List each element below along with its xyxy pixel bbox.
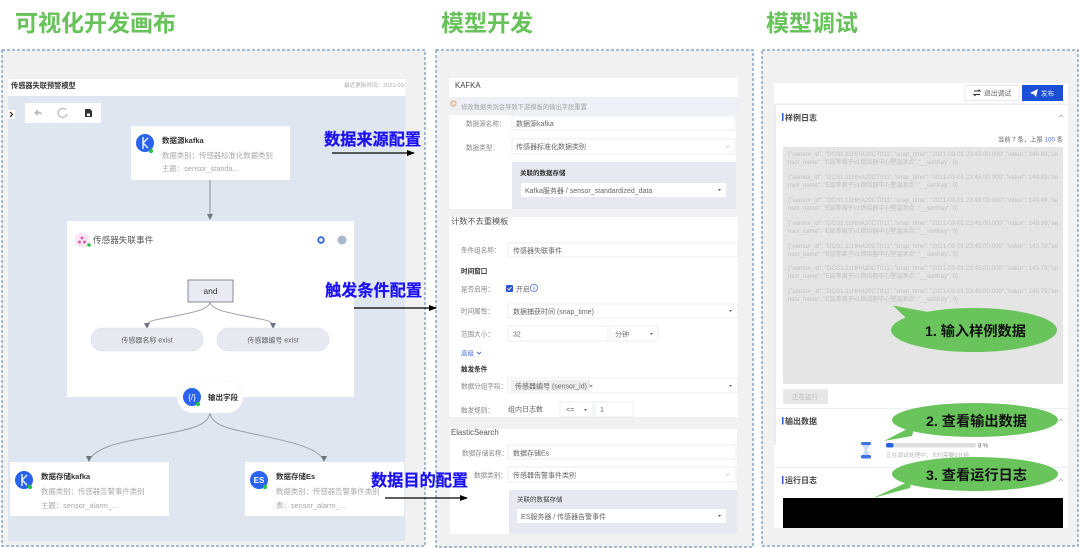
connectors: and to conditions	[144, 302, 276, 329]
node: output fields: 输出字段	[208, 392, 238, 402]
section: output data	[774, 416, 1068, 468]
node: data store Es: ES	[254, 476, 265, 485]
node: data source kafka: 主题：sensor_standa...	[162, 164, 239, 173]
section: count template	[449, 216, 738, 417]
panel: sensor lost event	[67, 221, 354, 397]
node: data store Es: 数据存储Es	[276, 471, 315, 481]
section: kafka	[449, 78, 738, 209]
section: elasticsearch: 传感器告警事件类别	[513, 470, 576, 480]
section: count template: 计数不去重模板	[451, 216, 508, 226]
canvas header	[8, 79, 406, 96]
section: kafka: 数据源名称：	[466, 119, 506, 128]
logic node: and: and	[203, 286, 218, 296]
section: kafka: KAFKA	[455, 81, 481, 90]
title: model development: 模型开发	[441, 10, 533, 36]
node: data store kafka: 主题：sensor_alarm_...	[41, 501, 118, 510]
section: elasticsearch: ElasticSearch	[451, 428, 499, 437]
node: data source kafka	[131, 126, 290, 180]
log entries: nsor_name": "E层等离子#1燃烧器中心壁温测点","__sortKey": 0}	[788, 272, 958, 280]
section: elasticsearch: 数据存储名称：	[462, 448, 508, 458]
section: output data: 8 %	[978, 444, 989, 450]
section: output data: 输出数据	[785, 416, 817, 426]
section: count template: 范围大小：	[461, 330, 494, 338]
connector: source to event	[207, 180, 213, 220]
annotation: data source config: 数据来源配置	[324, 131, 421, 149]
callout: 1 input sample data: 1. 输入样例数据	[925, 323, 1026, 340]
log entries: {"sensor_id": "DCS1.11HHA20CT011","snap_time": "2021-03-01 23:45:00.000","value": 149.39,"se	[788, 220, 1059, 227]
section: count template: 组内日志数	[508, 404, 543, 414]
section: output data: 正在调试处理中，大约需要3分钟	[886, 451, 969, 459]
toolbar	[8, 103, 101, 123]
node: data store kafka	[10, 462, 169, 516]
node: output fields: {/}	[188, 393, 196, 402]
section: elasticsearch: 关联的数据存储	[517, 494, 563, 504]
node: data store Es	[245, 462, 404, 516]
section: run log: 运行日志	[785, 475, 817, 485]
section: sample log	[774, 112, 1068, 409]
canvas content	[8, 79, 406, 541]
title: model debugging: 模型调试	[766, 10, 858, 36]
panel: model debugging	[762, 50, 1078, 546]
section: count template: 高级	[461, 348, 474, 358]
section: kafka: 数据类型：	[466, 143, 499, 152]
annotation: trigger condition config	[325, 281, 436, 308]
section: count template: 传感器编号 (sensor_id) ×	[515, 381, 593, 390]
log entries: nsor_name": "E层等离子#1燃烧器中心壁温测点","__sortKey": 0}	[788, 204, 958, 212]
log entries: nsor_name": "E层等离子#1燃烧器中心壁温测点","__sortKey": 0}	[788, 158, 958, 166]
log entries: nsor_name": "E层等离子#1燃烧器中心壁温测点","__sortKey": 0}	[788, 295, 958, 303]
canvas header: 传感器失联预警模型	[11, 81, 76, 90]
section: sample log: 当前 7 条，上限 100 条	[998, 134, 1064, 144]
section: count template: 1	[600, 407, 604, 414]
node: data store kafka: 数据类别：传感器告警事件类别	[41, 487, 144, 496]
section: count template: 开启	[516, 284, 530, 294]
title: visual canvas: 可视化开发画布	[15, 10, 176, 36]
section: kafka: 传感器标准化数据类别	[516, 142, 586, 151]
condition: sensor name exists: 传感器名称 exist	[121, 336, 173, 344]
logic node: and	[188, 280, 233, 302]
debug content	[774, 83, 1068, 528]
annotation: data destination config: 数据目的配置	[371, 472, 468, 490]
section: count template: 传感器失联事件	[513, 246, 562, 255]
canvas background	[8, 96, 405, 541]
section: count template: 数据捕获时间 (snap_time)	[513, 307, 594, 316]
node: data source kafka: 数据类别：传感器标准化数据类别	[162, 151, 273, 160]
annotation: data destination config	[371, 472, 468, 498]
panel: model development form	[436, 50, 753, 547]
node: output fields	[177, 381, 243, 413]
section: count template: 触发条件	[461, 364, 488, 374]
section: run log	[782, 475, 1063, 528]
section: count template: 时间窗口	[461, 266, 487, 276]
log entries	[788, 151, 1059, 303]
callout: 2 view output data	[884, 403, 1058, 441]
section: count template: 条件组名称：	[461, 246, 501, 254]
node: data source kafka: 数据源kafka	[162, 135, 205, 145]
log entries: {"sensor_id": "DCS1.11HHA20CT011","snap_time": "2021-03-01 23:45:00.000","value": 145.79,"se	[788, 288, 1059, 295]
section: kafka: Kafka服务器 / sensor_standardized_data	[525, 186, 652, 195]
section: kafka: 修改数据类别会导致下游模板的输出字段重置	[461, 102, 587, 111]
log entries: nsor_name": "E层等离子#1燃烧器中心壁温测点","__sortKey": 0}	[788, 181, 958, 189]
log entries: {"sensor_id": "DCS1.11HHA20CT011","snap_time": "2021-03-01 23:45:00.000","value": 143.79,"se	[788, 265, 1059, 272]
panel: sensor lost event: 传感器失联事件	[93, 234, 154, 245]
form content	[449, 78, 738, 534]
debug top bar	[774, 85, 1068, 105]
section: count template: 32	[513, 332, 521, 338]
section: sample log: 正在运行	[792, 392, 818, 401]
section: count template: 时间属性：	[461, 306, 494, 316]
callout: 3 view run log	[873, 457, 1058, 498]
section: kafka: 关联的数据存储	[520, 168, 566, 177]
section: sample log: 样例日志	[785, 112, 817, 122]
debug top bar: 发布	[1041, 88, 1054, 98]
node: data store Es: 数据类别：传感器告警事件类别	[276, 487, 379, 496]
section: count template: 触发规则：	[461, 406, 494, 414]
section: elasticsearch: ES服务器 / 传感器告警事件	[521, 512, 606, 521]
panel: visual canvas	[2, 50, 425, 546]
log entries: nsor_name": "E层等离子#1燃烧器中心壁温测点","__sortKey": 0}	[788, 250, 958, 258]
condition: sensor name exists	[91, 328, 203, 351]
section: count template: <=	[566, 407, 574, 414]
callout: 1 input sample data	[891, 306, 1057, 352]
node: data store Es: 表：sensor_alarm_...	[276, 501, 346, 510]
debug top bar: 退出调试	[984, 88, 1011, 98]
callout: 3 view run log: 3. 查看运行日志	[926, 467, 1027, 484]
section: elasticsearch	[450, 428, 737, 534]
section: elasticsearch: 数据存储Es	[513, 448, 550, 458]
condition: sensor id exists	[217, 328, 329, 351]
node: data store kafka: 数据存储kafka	[41, 471, 91, 481]
log entries: {"sensor_id": "DCS1.11HHA20CT011","snap_time": "2021-03-01 23:45:00.000","value": 142.79,"se	[788, 243, 1059, 250]
log entries: {"sensor_id": "DCS1.11HHA20CT011","snap_time": "2021-03-01 23:45:00.000","value": 149.69,"se	[788, 174, 1059, 181]
section: kafka: 数据源kafka	[516, 119, 554, 128]
section: count template: 分钟	[615, 330, 629, 338]
annotation: trigger condition config: 触发条件配置	[325, 281, 422, 300]
callout: 2 view output data: 2. 查看输出数据	[926, 413, 1027, 430]
connectors: output to stores	[86, 413, 327, 462]
log entries: {"sensor_id": "DCS1.11HHA20CT011","snap_time": "2021-03-01 23:45:00.000","value": 149.89,"se	[788, 151, 1059, 158]
log entries: nsor_name": "E层等离子#1燃烧器中心壁温测点","__sortKey": 0}	[788, 227, 958, 235]
section: count template: 数据分组字段：	[461, 382, 507, 390]
section: elasticsearch: 数据类别：	[474, 470, 507, 480]
condition: sensor id exists: 传感器编号 exist	[247, 336, 299, 344]
canvas header: 最近更新时间：2021-03-	[344, 81, 406, 89]
section: count template: 是否启用：	[461, 284, 494, 294]
log entries: {"sensor_id": "DCS1.11HHA20CT011","snap_time": "2021-03-01 23:45:00.000","value": 149.49,"se	[788, 197, 1059, 204]
